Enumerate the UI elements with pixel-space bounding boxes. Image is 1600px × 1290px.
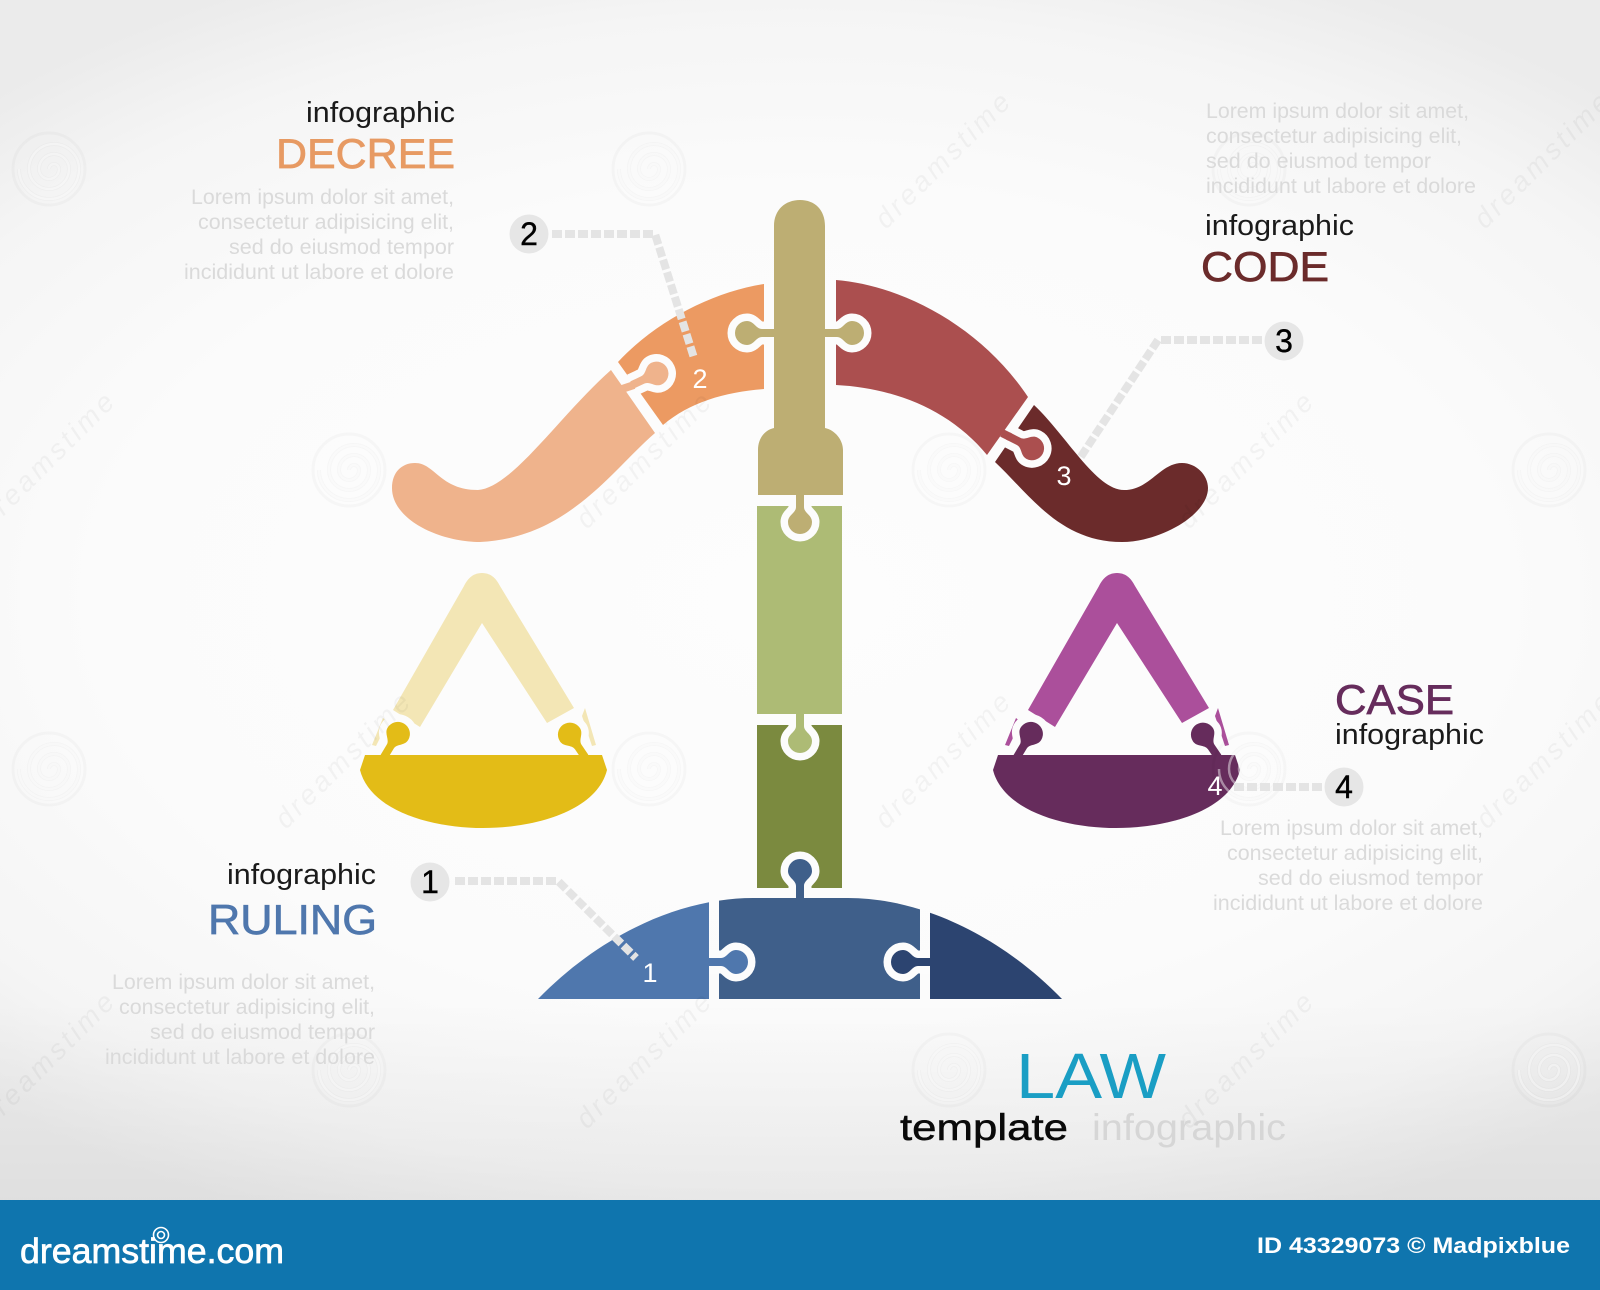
beam piece: peach left arm (392, 370, 655, 542)
watermark text: dreamstime (268, 686, 416, 834)
beam piece: red arm (836, 280, 1028, 455)
footer logo spiral (154, 1228, 168, 1242)
text block: case: sed do eiusmod tempor (1258, 867, 1483, 890)
puzzle key: light blue into mid blue (709, 950, 748, 974)
leader 2 (510, 214, 708, 394)
leader 3 (1056, 322, 1304, 491)
beam piece: dark brown arm (995, 405, 1208, 542)
text block: ruling: Lorem ipsum dolor sit amet, (112, 971, 375, 994)
text block: code: infographic (1205, 210, 1354, 242)
text block: ruling (105, 859, 377, 1069)
puzzle key: red into brown (1002, 425, 1048, 464)
right pan bowl (993, 717, 1240, 828)
footer credit: ID 43329073 © Madpixblue (1257, 1233, 1570, 1258)
beam piece: orange arm (618, 284, 764, 425)
watermark text: dreamstime (868, 86, 1016, 234)
text block: code: CODE (1201, 243, 1329, 290)
text block: case: infographic (1335, 719, 1484, 751)
watermark text: dreamstime (569, 986, 717, 1134)
text block: decree: sed do eiusmod tempor (229, 236, 454, 259)
puzzle key: top piece into light green (788, 495, 812, 534)
scales illustration (360, 200, 1240, 999)
base: dark blue piece (930, 912, 1062, 999)
main title: LAW template infographic: template (900, 1107, 1068, 1148)
text block: ruling: RULING (208, 896, 377, 943)
text block: code (1201, 100, 1476, 290)
footer logo text: dreamstime.com (20, 1232, 284, 1271)
main title: LAW template infographic: infographic (1092, 1107, 1286, 1148)
text block: ruling: infographic (227, 859, 376, 891)
text block: decree: DECREE (276, 130, 455, 177)
footer bar (0, 1200, 1600, 1290)
base: mid blue piece (719, 898, 920, 999)
text block: ruling: consectetur adipisicing elit, (119, 996, 375, 1019)
watermark spirals (13, 133, 1585, 1106)
leader 1 (410, 862, 658, 988)
text block: case (1213, 676, 1484, 915)
text block: ruling: incididunt ut labore et dolore (105, 1046, 375, 1069)
text block: case: incididunt ut labore et dolore (1213, 892, 1483, 915)
leader 2: 2 (692, 364, 708, 394)
text block: case: Lorem ipsum dolor sit amet, (1220, 817, 1483, 840)
watermark text: dreamstime (868, 686, 1016, 834)
main title: LAW template infographic (900, 1040, 1286, 1148)
leader 4 (1207, 768, 1364, 806)
leader 2: 2 (520, 216, 538, 252)
text block: code: sed do eiusmod tempor (1206, 150, 1431, 173)
watermark text: dreamstime (1171, 986, 1319, 1134)
text block: case: consectetur adipisicing elit, (1227, 842, 1483, 865)
puzzle key: base into dark green (788, 859, 812, 898)
text block: decree: infographic (306, 97, 455, 129)
puzzle key: peach into orange (622, 358, 672, 396)
pillar: dark green piece (757, 725, 842, 888)
left pan bowl (360, 717, 607, 828)
main title: LAW template infographic: LAW (1016, 1040, 1167, 1112)
text block: decree (184, 97, 455, 284)
leader 1: 1 (421, 864, 439, 900)
puzzle key: dark blue into mid blue (891, 950, 930, 974)
base: light blue piece (538, 902, 709, 999)
pillar: light green piece (757, 506, 842, 714)
text block: code: consectetur adipisicing elit, (1206, 125, 1462, 148)
right pan hanger (1005, 573, 1229, 746)
text block: code: Lorem ipsum dolor sit amet, (1206, 100, 1469, 123)
leader 1: 1 (642, 958, 658, 988)
leader 3: 3 (1056, 461, 1072, 491)
text block: code: incididunt ut labore et dolore (1206, 175, 1476, 198)
text block: decree: consectetur adipisicing elit, (198, 211, 454, 234)
text block: case: CASE (1335, 676, 1454, 723)
left pan hanger (372, 573, 596, 746)
text block: decree: incididunt ut labore et dolore (184, 261, 454, 284)
puzzle key: light green into dark green (788, 714, 812, 753)
watermark text: dreamstime (1171, 386, 1319, 534)
watermark text: dreamstime (569, 386, 717, 534)
pillar: top piece (735, 200, 864, 495)
leader 4: 4 (1335, 769, 1353, 805)
leader 3: 3 (1275, 323, 1293, 359)
text block: decree: Lorem ipsum dolor sit amet, (191, 186, 454, 209)
leader 4: 4 (1207, 771, 1223, 801)
text block: ruling: sed do eiusmod tempor (150, 1021, 375, 1044)
